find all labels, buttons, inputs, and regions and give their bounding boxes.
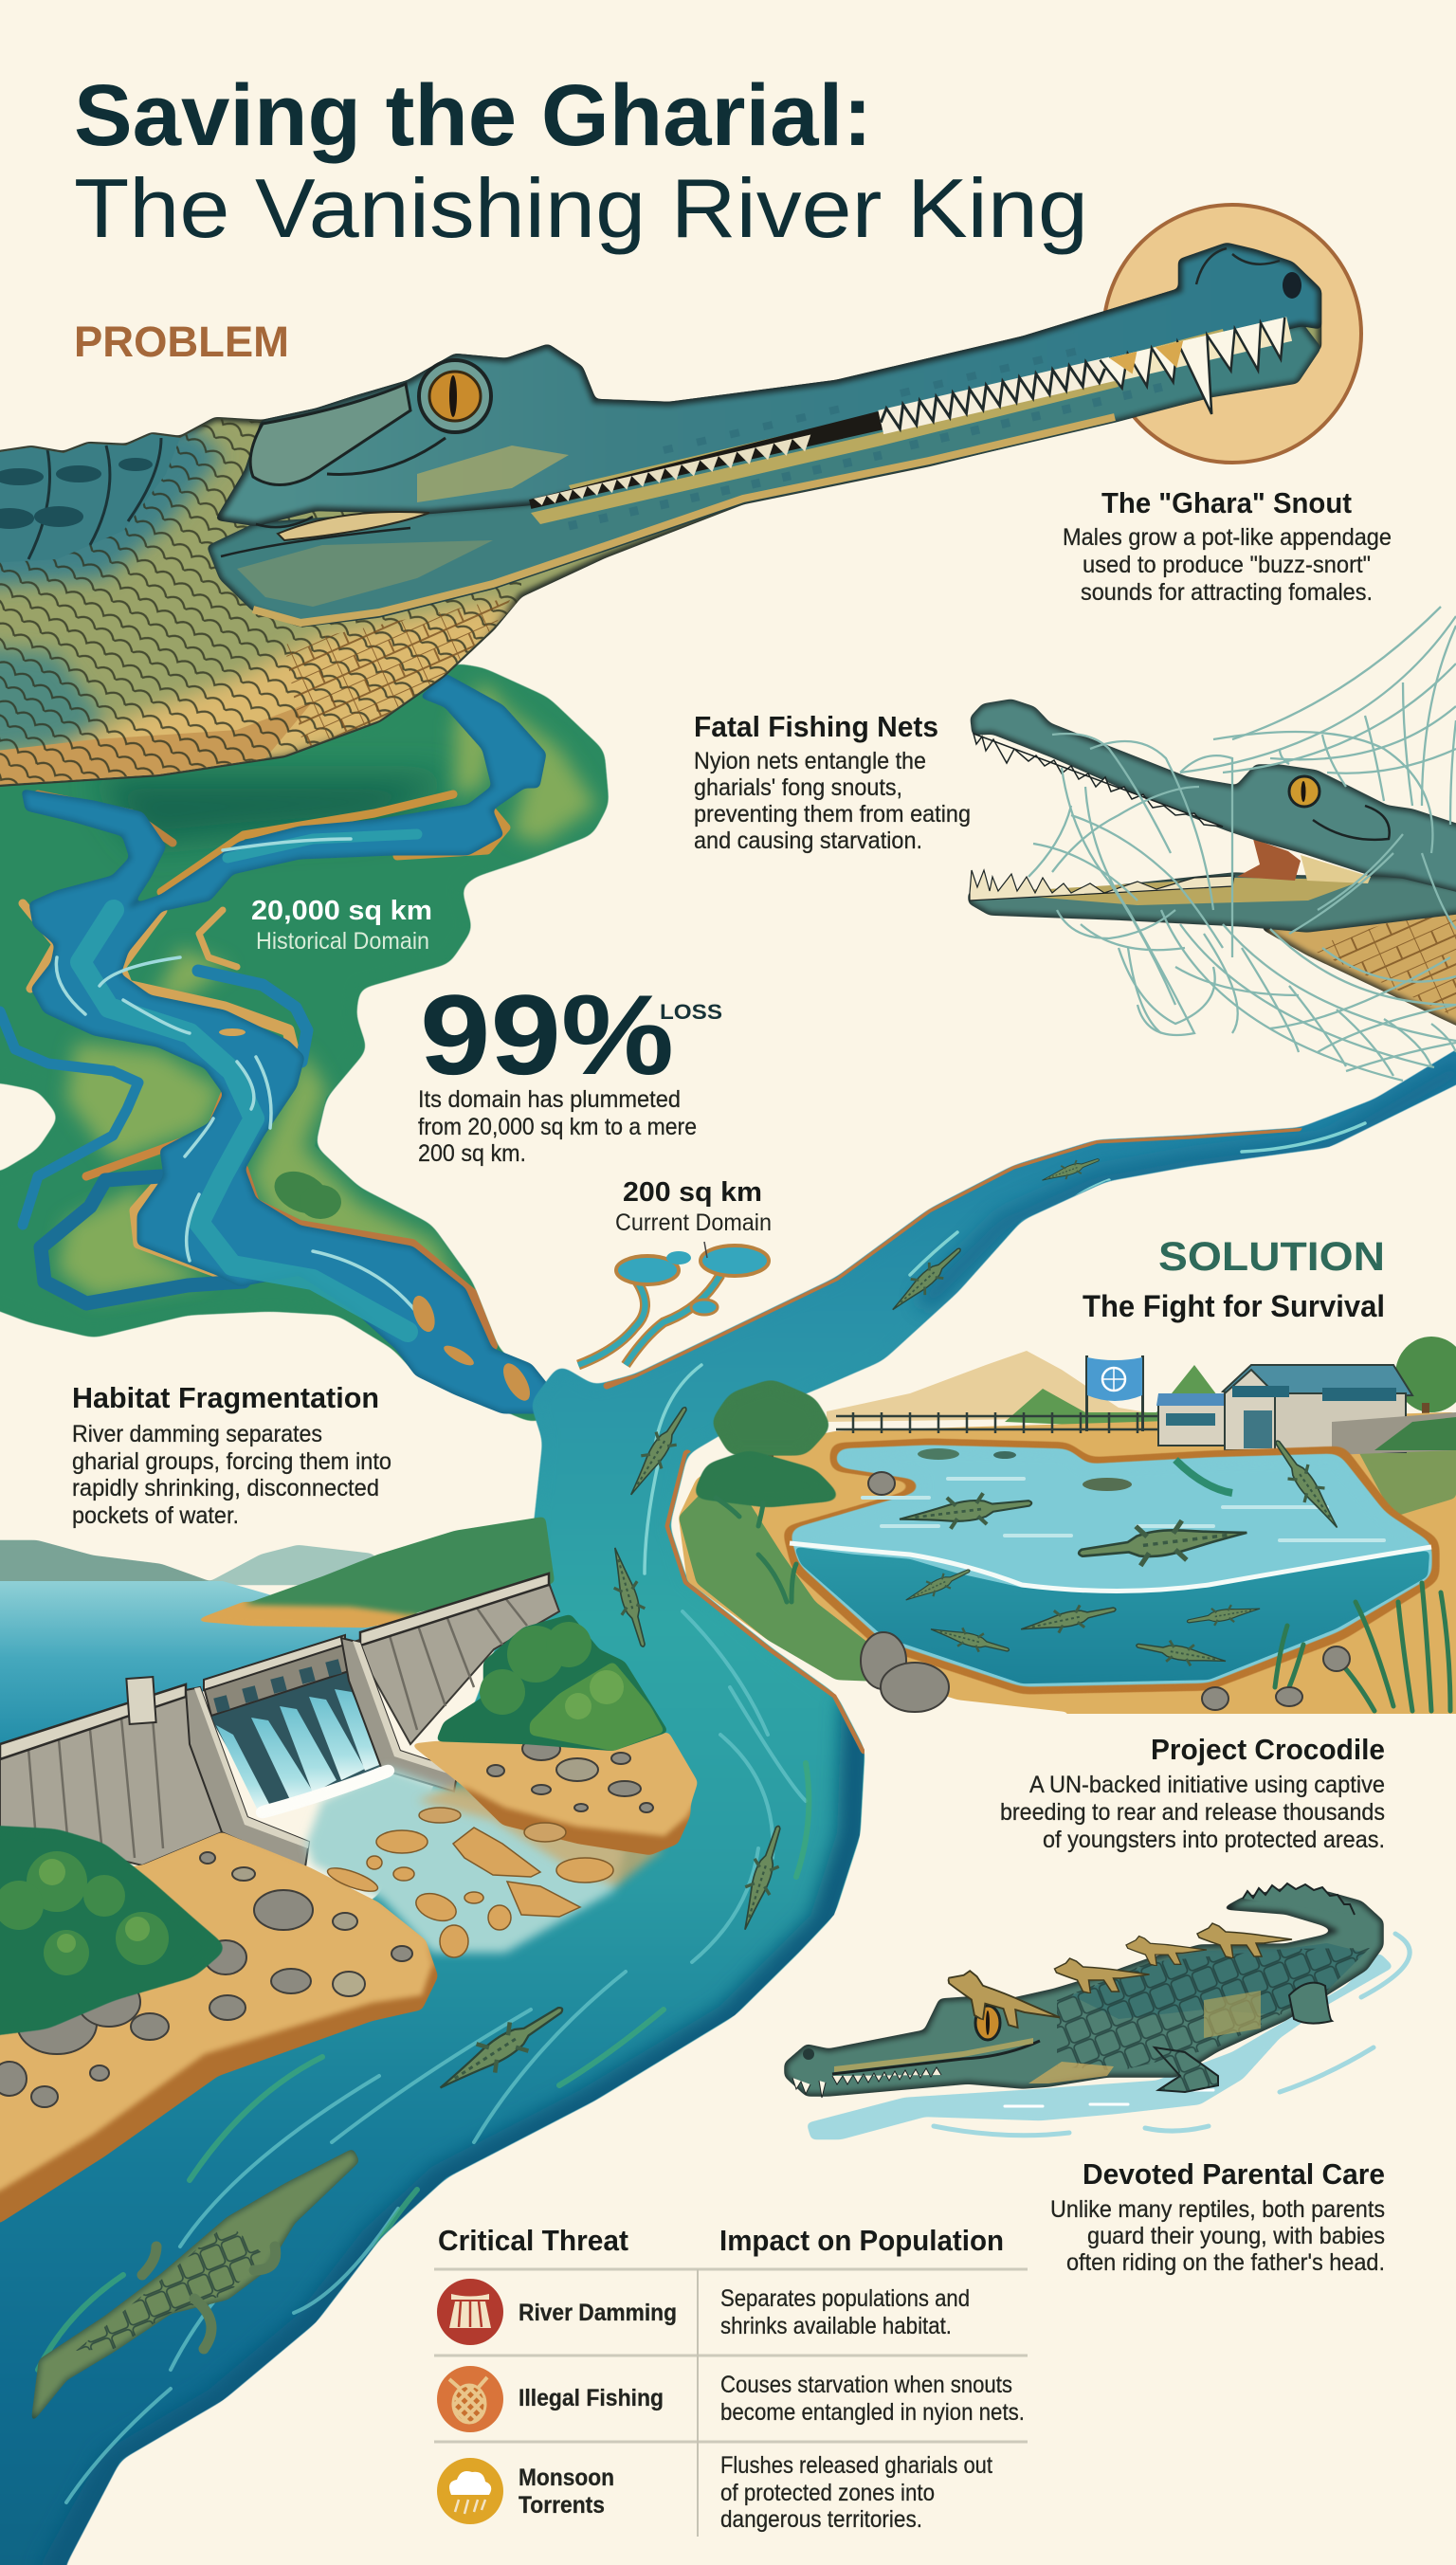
pond gharials — [898, 1434, 1347, 1672]
panel: breeding centre pond — [679, 1337, 1456, 1735]
sand banks — [0, 1732, 698, 2223]
parent legs — [1155, 2047, 1218, 2092]
fence — [836, 1412, 1175, 1433]
lower jaw — [970, 874, 1456, 931]
fishing net lines — [1028, 607, 1456, 1081]
river islands — [219, 1028, 536, 1405]
heading: solution: SOLUTION — [1158, 1234, 1385, 1280]
callout: habitat fragmentation: River damming separates — [72, 1421, 322, 1447]
gray dam walls — [0, 1574, 559, 1867]
callout: Ghara snout — [1063, 486, 1392, 606]
heading: problem: PROBLEM — [74, 318, 289, 366]
callout: project crocodile: A UN-backed initiative using captive — [1029, 1772, 1385, 1798]
callout: fatal fishing nets: Nyion nets entangle the — [694, 748, 926, 774]
parent snout details — [832, 2041, 1040, 2074]
callout: devoted parental care: Unlike many reptiles, both parents — [1050, 2196, 1385, 2223]
heading: solution: The Fight for Survival — [1083, 1289, 1385, 1323]
callout: habitat fragmentation: pockets of water. — [72, 1502, 239, 1529]
eye — [419, 360, 491, 432]
row: monsoon torrents: Flushes released gharials out — [720, 2452, 992, 2479]
table headers: Impact on Population — [719, 2224, 1004, 2257]
shallow water and foam — [306, 1768, 626, 1953]
mouth interior — [1237, 839, 1301, 881]
callout: project crocodile: Project Crocodile — [1151, 1733, 1385, 1766]
table headers: Critical Threat — [438, 2224, 628, 2257]
river: upper branches and sand bars — [0, 675, 569, 1412]
parent body — [786, 1889, 1382, 2095]
nostril and snout bulb — [1283, 272, 1301, 299]
dam scene — [0, 1517, 698, 2223]
heading: solution — [1083, 1234, 1385, 1323]
row: illegal fishing: become entangled in nyion nets. — [720, 2399, 1025, 2426]
callout: fatal fishing nets: Fatal Fishing Nets — [694, 710, 938, 743]
water splash — [807, 1934, 1410, 2139]
icon: rain cloud — [437, 2458, 503, 2524]
label: historical domain — [251, 896, 432, 955]
callout: Ghara snout: The "Ghara" Snout — [1101, 486, 1352, 519]
throat and neck — [1263, 882, 1456, 1033]
stat: 99% loss: 99% — [420, 972, 674, 1099]
forest left — [0, 1825, 228, 2038]
map: historical domain green area — [0, 664, 609, 1422]
table headers — [438, 2224, 1004, 2257]
row: monsoon torrents: Torrents — [519, 2492, 605, 2519]
land — [679, 1412, 1456, 1735]
upper head — [218, 245, 1320, 524]
label: current domain: 200 sq km — [623, 1177, 762, 1208]
label: historical domain: Historical Domain — [256, 928, 429, 955]
stat: 99% loss: from 20,000 sq km to a mere — [418, 1114, 697, 1140]
row: illegal fishing — [437, 2366, 1025, 2432]
callout: habitat fragmentation: Habitat Fragmentation — [72, 1381, 379, 1414]
table: threats and impact — [434, 2224, 1028, 2537]
callout: habitat fragmentation — [72, 1381, 391, 1529]
callout: fatal fishing nets — [694, 710, 971, 854]
callout: fatal fishing nets: and causing starvation. — [694, 828, 922, 854]
lower jaw — [209, 324, 1320, 626]
row: monsoon torrents: of protected zones into — [720, 2480, 935, 2506]
ochre river rocks — [325, 1808, 613, 1957]
title: The Vanishing River King — [74, 161, 1088, 255]
callout: Ghara snout: sounds for attracting fomales. — [1081, 579, 1373, 606]
reservoir lake — [0, 1581, 379, 1759]
callout: project crocodile — [1000, 1733, 1385, 1853]
callout: devoted parental care — [1050, 2157, 1385, 2276]
row: river damming: shrinks available habitat. — [720, 2313, 952, 2339]
map: current domain pools — [578, 1242, 769, 1365]
neck and belly — [0, 290, 1320, 787]
swimming gharials — [431, 1153, 1101, 2102]
icon: net — [437, 2366, 503, 2432]
stat: 99% loss: Its domain has plummeted — [418, 1086, 681, 1113]
illustration: gharial tangled in fishing net — [970, 607, 1456, 1081]
callout: fatal fishing nets: gharials' fong snouts, — [694, 774, 902, 801]
callout: devoted parental care: Devoted Parental Care — [1083, 2157, 1385, 2191]
forest centre — [436, 1614, 668, 1751]
title — [74, 67, 1088, 255]
callout: Ghara snout: Males grow a pot-like appendage — [1063, 524, 1392, 551]
callout: habitat fragmentation: rapidly shrinking, disconnected — [72, 1475, 379, 1501]
row: illegal fishing: Illegal Fishing — [519, 2385, 664, 2411]
babies on back — [939, 1923, 1292, 2041]
callout: project crocodile: breeding to rear and release thousands — [1000, 1799, 1385, 1826]
net gharial teeth — [974, 734, 1223, 827]
gray rocks — [0, 1737, 653, 2107]
main river — [0, 1014, 1456, 2565]
row: monsoon torrents: dangerous territories. — [720, 2506, 922, 2533]
icon: dam — [437, 2279, 503, 2345]
background hills — [827, 1337, 1456, 1431]
label: current domain: Current Domain — [615, 1210, 772, 1236]
callout: devoted parental care: often riding on the father's head. — [1066, 2249, 1385, 2276]
tree and bush — [692, 1379, 844, 1507]
Ghara highlight circle — [1103, 205, 1361, 463]
stat: 99% loss: 200 sq km. — [418, 1140, 526, 1167]
stat: 99% loss: LOSS — [660, 1000, 722, 1024]
row: monsoon torrents: Monsoon — [519, 2465, 614, 2491]
label: current domain — [615, 1177, 772, 1236]
river shading and streaks — [38, 1071, 1456, 2565]
UN flag — [1085, 1355, 1144, 1431]
green hill — [193, 1517, 555, 1628]
brow and cheek — [250, 384, 410, 485]
title: Saving the Gharial: — [74, 67, 872, 164]
stat: 99% loss — [418, 972, 722, 1167]
upper jaw — [972, 700, 1456, 896]
callout: Ghara snout: used to produce "buzz-snort" — [1083, 552, 1371, 578]
mountains — [0, 1540, 408, 1588]
centre building — [1156, 1365, 1456, 1455]
row: river damming: Separates populations and — [720, 2285, 970, 2312]
callout: devoted parental care: guard their young, with babies — [1087, 2223, 1385, 2249]
callout: project crocodile: of youngsters into protected areas. — [1043, 1827, 1385, 1853]
dorsal scutes — [0, 434, 180, 564]
teeth along mouth line — [527, 316, 1304, 568]
label: historical domain: 20,000 sq km — [251, 896, 432, 926]
illustration: big gharial head with Ghara snout — [0, 205, 1361, 801]
large gharial in river — [32, 2150, 358, 2421]
callout: fatal fishing nets: preventing them from eating — [694, 801, 971, 828]
row: river damming — [437, 2279, 970, 2345]
reeds and rocks — [716, 1498, 1450, 1711]
illustration: parent gharial with babies — [786, 1883, 1410, 2139]
row: monsoon torrents — [437, 2452, 992, 2533]
row: river damming: River Damming — [519, 2300, 677, 2326]
pond rim and water — [782, 1439, 1439, 1694]
row: illegal fishing: Couses starvation when snouts — [720, 2372, 1012, 2398]
callout: habitat fragmentation: gharial groups, forcing them into — [72, 1448, 391, 1475]
